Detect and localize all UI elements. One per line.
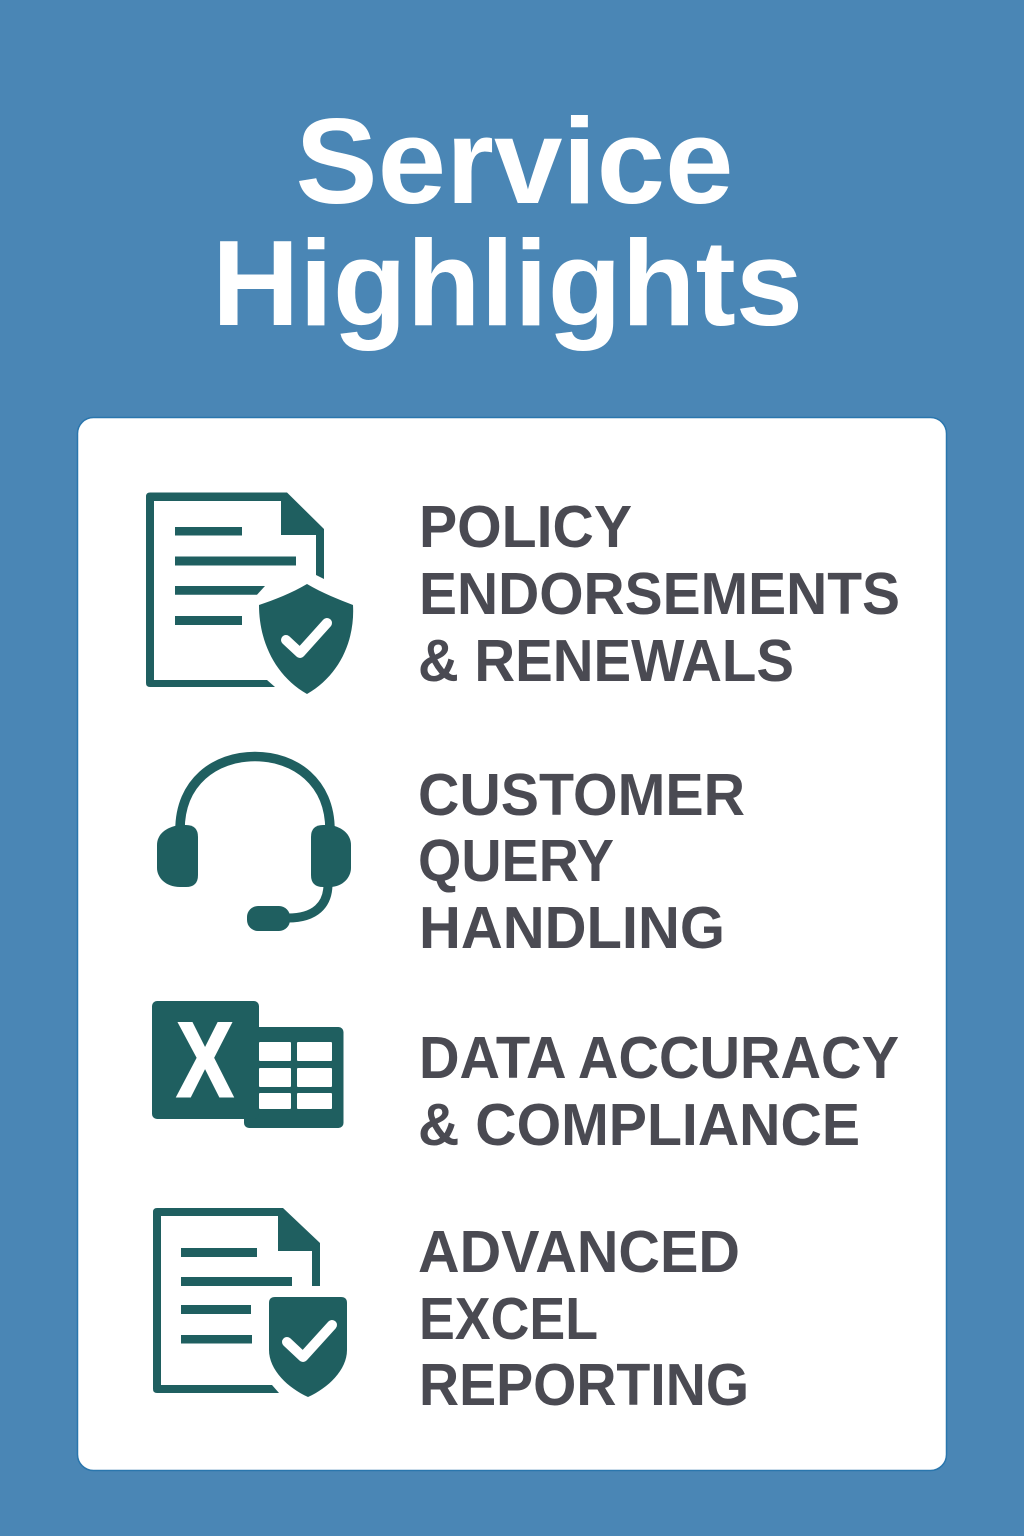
text: customer query handling: HANDLING bbox=[419, 895, 725, 961]
text: policy endorsements and renewals bbox=[418, 494, 900, 694]
text: data accuracy and compliance: DATA ACCURACY bbox=[419, 1025, 899, 1091]
icon: headset bbox=[157, 756, 351, 931]
icon: report document with shield bbox=[153, 1208, 347, 1397]
text: customer query handling bbox=[418, 762, 745, 961]
text: policy endorsements and renewals: ENDORSEMENTS bbox=[419, 561, 900, 627]
icon: spreadsheet bbox=[152, 1000, 344, 1128]
text: advanced excel reporting: ADVANCED bbox=[418, 1219, 740, 1285]
text: policy endorsements and renewals: POLICY bbox=[419, 494, 632, 560]
panel: service list card bbox=[78, 418, 946, 1470]
title bbox=[212, 93, 803, 351]
text: customer query handling: QUERY bbox=[418, 828, 614, 894]
text: advanced excel reporting bbox=[418, 1219, 749, 1418]
text: advanced excel reporting: REPORTING bbox=[419, 1352, 749, 1418]
text: customer query handling: CUSTOMER bbox=[418, 762, 745, 828]
text: data accuracy and compliance: & COMPLIANCE bbox=[418, 1092, 860, 1158]
icon: policy document with shield bbox=[146, 492, 353, 694]
text: advanced excel reporting: EXCEL bbox=[419, 1286, 598, 1352]
text: policy endorsements and renewals: & RENEWALS bbox=[418, 628, 794, 694]
title: Highlights bbox=[212, 215, 803, 351]
text: data accuracy and compliance bbox=[418, 1025, 899, 1158]
icon: spreadsheet: X bbox=[176, 1000, 234, 1120]
title: Service bbox=[296, 93, 734, 229]
